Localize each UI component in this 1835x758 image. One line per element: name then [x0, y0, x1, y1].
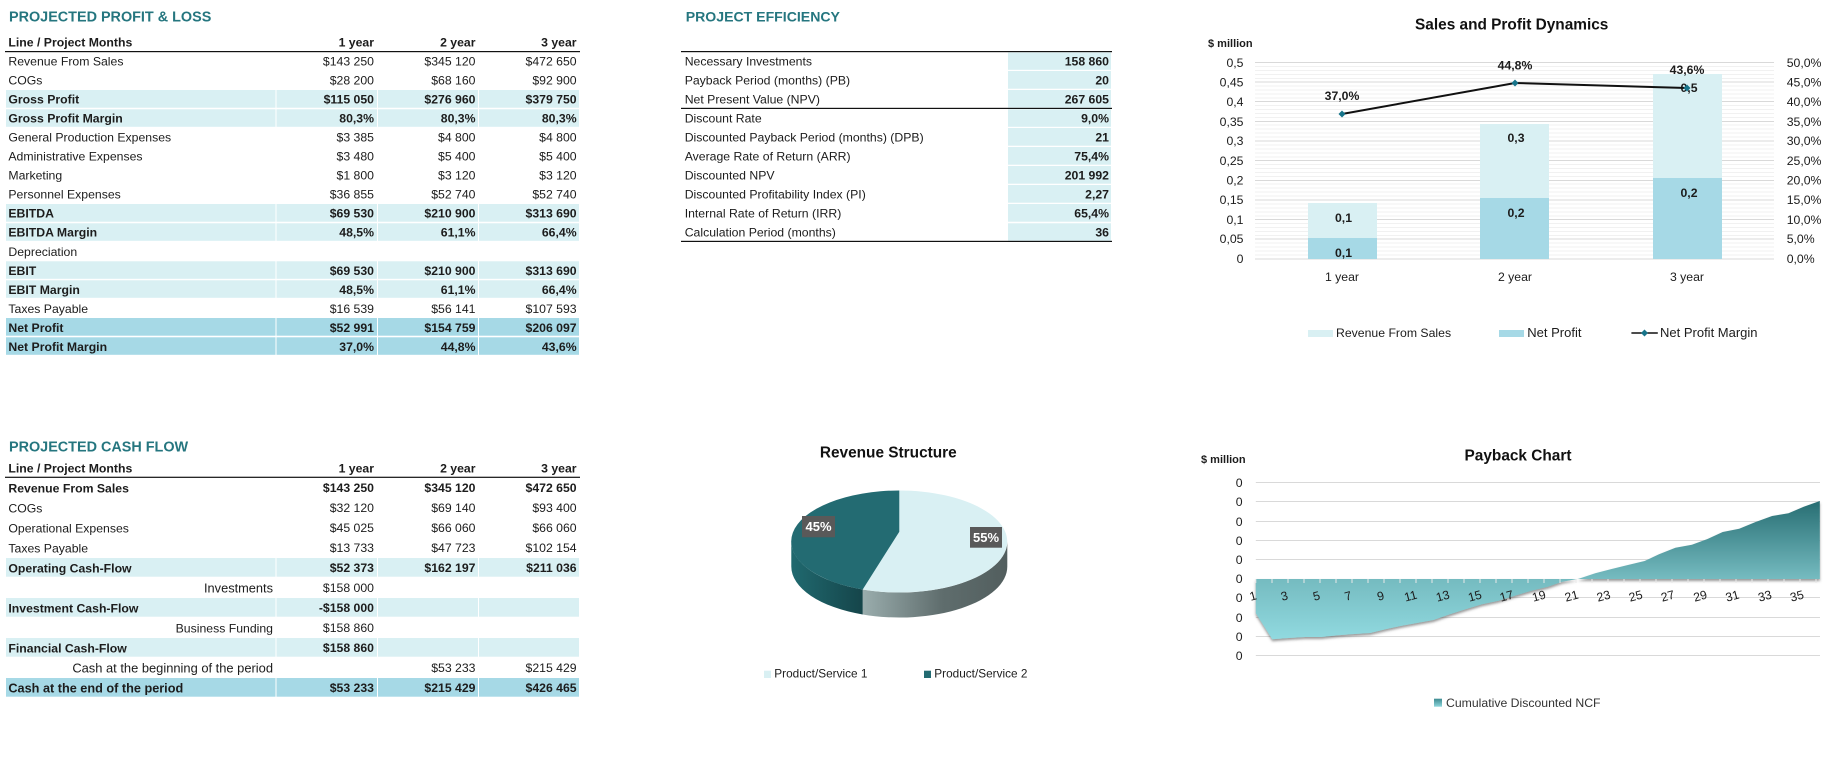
table rows: Cash at the beginning of the period	[72, 660, 273, 676]
table header: Line / Project Months	[8, 462, 132, 476]
bar value labels: 0,1	[1335, 246, 1352, 260]
zero axis ticks	[1256, 579, 1816, 583]
table rows: General Production Expenses	[8, 130, 171, 144]
x axis labels	[1325, 270, 1704, 284]
table rows: $68 160	[431, 74, 476, 88]
right axis labels	[1787, 56, 1822, 266]
table rows: 80,3%	[441, 112, 476, 126]
table rows: $92 900	[532, 74, 577, 88]
bar value labels	[1335, 81, 1698, 260]
bar value labels: 0,3	[1507, 131, 1525, 145]
row backgrounds	[6, 90, 579, 355]
table rows: 48,5%	[339, 226, 374, 240]
bars: revenue from sales	[1308, 74, 1722, 259]
efficiency rows: Discounted Profitability Index (PI)	[685, 188, 866, 202]
efficiency rows	[685, 54, 1109, 240]
y axis labels: 0	[1236, 476, 1243, 490]
table rows: $52 740	[532, 188, 577, 202]
efficiency rows: Net Present Value (NPV)	[685, 92, 820, 106]
y axis labels: 0	[1236, 495, 1243, 509]
table rows: $313 690	[526, 206, 577, 220]
table rows: 43,6%	[542, 340, 577, 354]
x axis labels: 17	[1498, 588, 1515, 605]
left axis labels: 0,35	[1220, 115, 1244, 129]
table rows: $52 373	[330, 561, 374, 575]
left axis labels: 0,2	[1226, 174, 1244, 188]
x axis labels: 3 year	[1670, 270, 1704, 284]
table rows: $47 723	[431, 541, 476, 555]
table rows: 44,8%	[441, 340, 476, 354]
legend: Net Profit	[1527, 325, 1582, 340]
table rows: Operational Expenses	[8, 522, 129, 536]
axis unit: $ million	[1201, 454, 1246, 466]
panel: sales and profit dynamics chart	[1208, 16, 1822, 340]
data label 55%: 55%	[973, 530, 999, 545]
line value labels: 43,6%	[1670, 63, 1704, 77]
chart title: Sales and Profit Dynamics	[1415, 16, 1608, 34]
table rows: $45 025	[330, 521, 374, 535]
heading: project efficiency: PROJECT EFFICIENCY	[686, 8, 841, 24]
table header: 2 year	[440, 36, 476, 50]
table rows: $16 539	[330, 302, 374, 316]
x axis labels	[1248, 588, 1806, 605]
table rows: $1 800	[337, 168, 374, 182]
efficiency rows: Average Rate of Return (ARR)	[685, 150, 851, 164]
table rows: 48,5%	[339, 283, 374, 297]
x axis labels: 33	[1756, 588, 1773, 605]
table rows: $345 120	[424, 54, 476, 68]
efficiency rows: 2,27	[1085, 188, 1109, 202]
table rows: $69 530	[330, 206, 374, 220]
left axis labels: 0,05	[1220, 232, 1244, 246]
table header: 2 year	[440, 462, 476, 476]
x axis labels: 25	[1627, 588, 1644, 605]
right axis labels: 30,0%	[1787, 134, 1822, 148]
table rows: $69 530	[330, 264, 374, 278]
line value labels: 37,0%	[1325, 89, 1359, 103]
panel: payback chart	[1201, 448, 1820, 710]
table rows: EBITDA Margin	[8, 226, 97, 240]
table rows: $32 120	[330, 501, 374, 515]
data label 55%	[970, 527, 1002, 548]
left axis labels: 0,1	[1226, 213, 1244, 227]
table rows: $28 200	[330, 74, 374, 88]
x axis labels: 19	[1531, 588, 1548, 605]
table rows: 80,3%	[542, 112, 577, 126]
table rows: Administrative Expenses	[8, 150, 143, 164]
x axis labels: 15	[1466, 588, 1483, 605]
table rows: EBITDA	[8, 206, 54, 220]
x axis labels: 13	[1434, 588, 1451, 605]
table rows: Gross Profit	[8, 92, 79, 106]
table rows: $3 120	[539, 168, 577, 182]
table rows: Net Profit Margin	[8, 340, 107, 354]
table rows: $102 154	[526, 541, 577, 555]
table header: 3 year	[541, 462, 577, 476]
bar value labels: 0,1	[1335, 211, 1352, 225]
table rows: $158 860	[323, 621, 374, 635]
right axis labels: 40,0%	[1787, 95, 1822, 109]
table rows: Investments	[204, 580, 273, 596]
left axis labels: 0	[1237, 252, 1244, 266]
x axis labels: 1 year	[1325, 270, 1359, 284]
x axis labels: 27	[1659, 588, 1676, 605]
left axis labels: 0,5	[1226, 56, 1244, 70]
table rows: Financial Cash-Flow	[8, 642, 127, 656]
x axis labels: 29	[1692, 588, 1709, 605]
y axis labels: 0	[1236, 572, 1243, 586]
table rows: $158 860	[323, 641, 374, 655]
table rows: Depreciation	[8, 245, 77, 259]
table rows: Net Profit	[8, 321, 64, 335]
table rows: $313 690	[526, 264, 577, 278]
efficiency rows: Payback Period (months) (PB)	[685, 74, 850, 88]
table rows: $52 991	[330, 321, 374, 335]
table rows: -$158 000	[319, 601, 374, 615]
table rows: $36 855	[330, 188, 374, 202]
efficiency rows: 158 860	[1065, 54, 1109, 68]
x axis labels: 7	[1343, 588, 1353, 604]
left axis labels: 0,15	[1220, 193, 1244, 207]
efficiency rows: 267 605	[1065, 92, 1109, 106]
data label 45%: 45%	[805, 519, 832, 534]
table rows: $5 400	[539, 150, 577, 164]
y axis labels: 0	[1236, 534, 1243, 548]
chart title: Payback Chart	[1465, 448, 1571, 464]
left axis labels: 0,4	[1226, 95, 1244, 109]
x axis labels: 5	[1311, 588, 1322, 604]
table rows: $5 400	[438, 150, 476, 164]
table rows: COGs	[8, 502, 42, 516]
table rows: Taxes Payable	[8, 542, 88, 556]
table rows: Investment Cash-Flow	[8, 602, 139, 616]
efficiency rows: 201 992	[1065, 168, 1109, 182]
x axis labels: 23	[1595, 588, 1612, 605]
efficiency rows: Necessary Investments	[685, 54, 812, 68]
value column background	[1008, 52, 1111, 241]
legend: Net Profit Margin	[1660, 325, 1758, 340]
table rows: $143 250	[323, 54, 374, 68]
efficiency rows: 9,0%	[1081, 112, 1109, 126]
y axis labels: 0	[1236, 591, 1243, 605]
left axis unit: $ million	[1208, 38, 1253, 50]
x axis labels: 2 year	[1498, 270, 1532, 284]
table rows: Revenue From Sales	[8, 54, 123, 68]
table rows: Personnel Expenses	[8, 188, 121, 202]
table rows: 61,1%	[441, 283, 476, 297]
legend: Cumulative Discounted NCF	[1446, 696, 1601, 710]
table rows: $472 650	[526, 54, 577, 68]
right axis labels: 25,0%	[1787, 154, 1822, 168]
data label 45%	[802, 516, 835, 537]
x axis labels: 3	[1279, 588, 1290, 604]
y axis labels: 0	[1236, 611, 1243, 625]
table rows: Gross Profit Margin	[8, 112, 123, 126]
table rows	[8, 481, 577, 696]
table rows: Revenue From Sales	[8, 482, 129, 496]
left axis labels: 0,25	[1220, 154, 1244, 168]
chart title: Revenue Structure	[820, 444, 957, 462]
right axis labels: 20,0%	[1787, 174, 1822, 188]
legend	[1308, 325, 1758, 340]
table rows: $52 740	[431, 188, 476, 202]
efficiency rows: 36	[1095, 226, 1109, 240]
table rows: EBIT Margin	[8, 283, 80, 297]
right axis labels: 10,0%	[1787, 213, 1822, 227]
panel: project efficiency	[681, 8, 1112, 242]
efficiency rows: 21	[1095, 130, 1109, 144]
heading: projected profit and loss: PROJECTED PROFIT & LOSS	[9, 10, 212, 26]
efficiency rows: 65,4%	[1074, 206, 1109, 220]
x axis labels: 31	[1724, 588, 1741, 605]
table rows: Marketing	[8, 168, 62, 182]
efficiency rows: Internal Rate of Return (IRR)	[685, 206, 841, 220]
left axis labels: 0,3	[1226, 134, 1244, 148]
table rows: $66 060	[431, 521, 476, 535]
table rows	[8, 54, 577, 354]
table header: 1 year	[339, 36, 374, 50]
efficiency rows: Discount Rate	[685, 112, 762, 126]
efficiency rows: Discounted NPV	[685, 168, 775, 182]
legend: Revenue From Sales	[1336, 326, 1451, 340]
table rows: $206 097	[526, 321, 577, 335]
left axis labels	[1220, 56, 1244, 266]
x axis labels: 35	[1789, 588, 1806, 605]
table rows: $211 036	[526, 561, 577, 575]
y axis labels: 0	[1236, 649, 1243, 663]
table rows: $215 429	[424, 681, 476, 695]
bars: net profit	[1308, 178, 1722, 259]
table rows: $210 900	[424, 206, 476, 220]
x axis labels: 11	[1403, 588, 1419, 605]
table rows: $345 120	[424, 481, 476, 495]
legend: Product/Service 2	[934, 666, 1027, 680]
table rows: $154 759	[424, 321, 476, 335]
y axis labels: 0	[1236, 553, 1243, 567]
line: net profit margin	[1338, 80, 1690, 118]
x axis labels: 1	[1248, 588, 1258, 604]
right axis labels: 0,0%	[1787, 252, 1815, 266]
table rows: $472 650	[526, 481, 577, 495]
table rows: Business Funding	[176, 622, 273, 636]
table rows: COGs	[8, 74, 42, 88]
table rows: $210 900	[424, 264, 476, 278]
table rows: 80,3%	[339, 112, 374, 126]
table rows: $107 593	[526, 302, 577, 316]
right axis labels: 50,0%	[1787, 56, 1822, 70]
table rows: $143 250	[323, 481, 374, 495]
table rows: $426 465	[526, 681, 577, 695]
table rows: $69 140	[431, 501, 476, 515]
right axis labels: 5,0%	[1787, 232, 1815, 246]
table rows: Cash at the end of the period	[8, 682, 183, 696]
table rows: $3 120	[438, 168, 476, 182]
table header: 1 year	[339, 462, 374, 476]
table rows: 66,4%	[542, 283, 577, 297]
table header	[5, 36, 580, 52]
right axis labels: 35,0%	[1787, 115, 1822, 129]
table rows: $53 233	[330, 681, 374, 695]
pie	[791, 490, 1007, 618]
table rows: Operating Cash-Flow	[8, 562, 132, 576]
bar value labels: 0,5	[1680, 81, 1698, 95]
right axis labels: 45,0%	[1787, 76, 1822, 90]
area: cumulative discounted NCF	[1256, 501, 1820, 639]
table rows: $53 233	[431, 661, 476, 675]
bar value labels: 0,2	[1680, 186, 1698, 200]
table rows: $13 733	[330, 541, 374, 555]
table rows: $115 050	[324, 92, 374, 106]
heading: projected cash flow: PROJECTED CASH FLOW	[9, 440, 189, 456]
table rows: $215 429	[526, 661, 577, 675]
table rows: $4 800	[438, 130, 476, 144]
table rows: $158 000	[323, 581, 374, 595]
y axis labels: 0	[1236, 515, 1243, 529]
table header: Line / Project Months	[8, 36, 132, 50]
table rows: 37,0%	[339, 340, 374, 354]
efficiency rows: Calculation Period (months)	[685, 226, 836, 240]
table rows: EBIT	[8, 264, 37, 278]
table rows: $3 480	[337, 150, 374, 164]
table rows: $66 060	[532, 521, 577, 535]
table rows: $379 750	[526, 92, 577, 106]
efficiency rows: 75,4%	[1074, 150, 1109, 164]
row backgrounds	[6, 558, 579, 697]
table rows: $3 385	[337, 130, 374, 144]
panel: projected cash flow	[5, 440, 580, 697]
table rows: $56 141	[431, 302, 476, 316]
panel: revenue structure pie chart	[764, 444, 1027, 680]
table rows: $4 800	[539, 130, 577, 144]
table rows: 61,1%	[441, 226, 476, 240]
efficiency rows: 20	[1095, 74, 1109, 88]
bar value labels: 0,2	[1507, 206, 1525, 220]
legend	[764, 666, 1027, 680]
table rows: $276 960	[424, 92, 476, 106]
right axis labels: 15,0%	[1787, 193, 1822, 207]
table rows: Taxes Payable	[8, 302, 88, 316]
table rows: 66,4%	[542, 226, 577, 240]
efficiency rows: Discounted Payback Period (months) (DPB)	[685, 130, 924, 144]
panel: projected profit and loss	[5, 10, 580, 355]
legend: Product/Service 1	[774, 666, 867, 680]
table rows: $93 400	[532, 501, 577, 515]
line value labels: 44,8%	[1498, 58, 1532, 72]
table header	[5, 462, 580, 478]
y axis labels	[1236, 476, 1243, 663]
y axis labels: 0	[1236, 630, 1243, 644]
left axis labels: 0,45	[1220, 76, 1244, 90]
table rows: $162 197	[424, 561, 476, 575]
x axis labels: 21	[1563, 588, 1580, 605]
table header: 3 year	[541, 36, 577, 50]
x axis labels: 9	[1376, 588, 1386, 604]
line value labels	[1325, 58, 1704, 103]
